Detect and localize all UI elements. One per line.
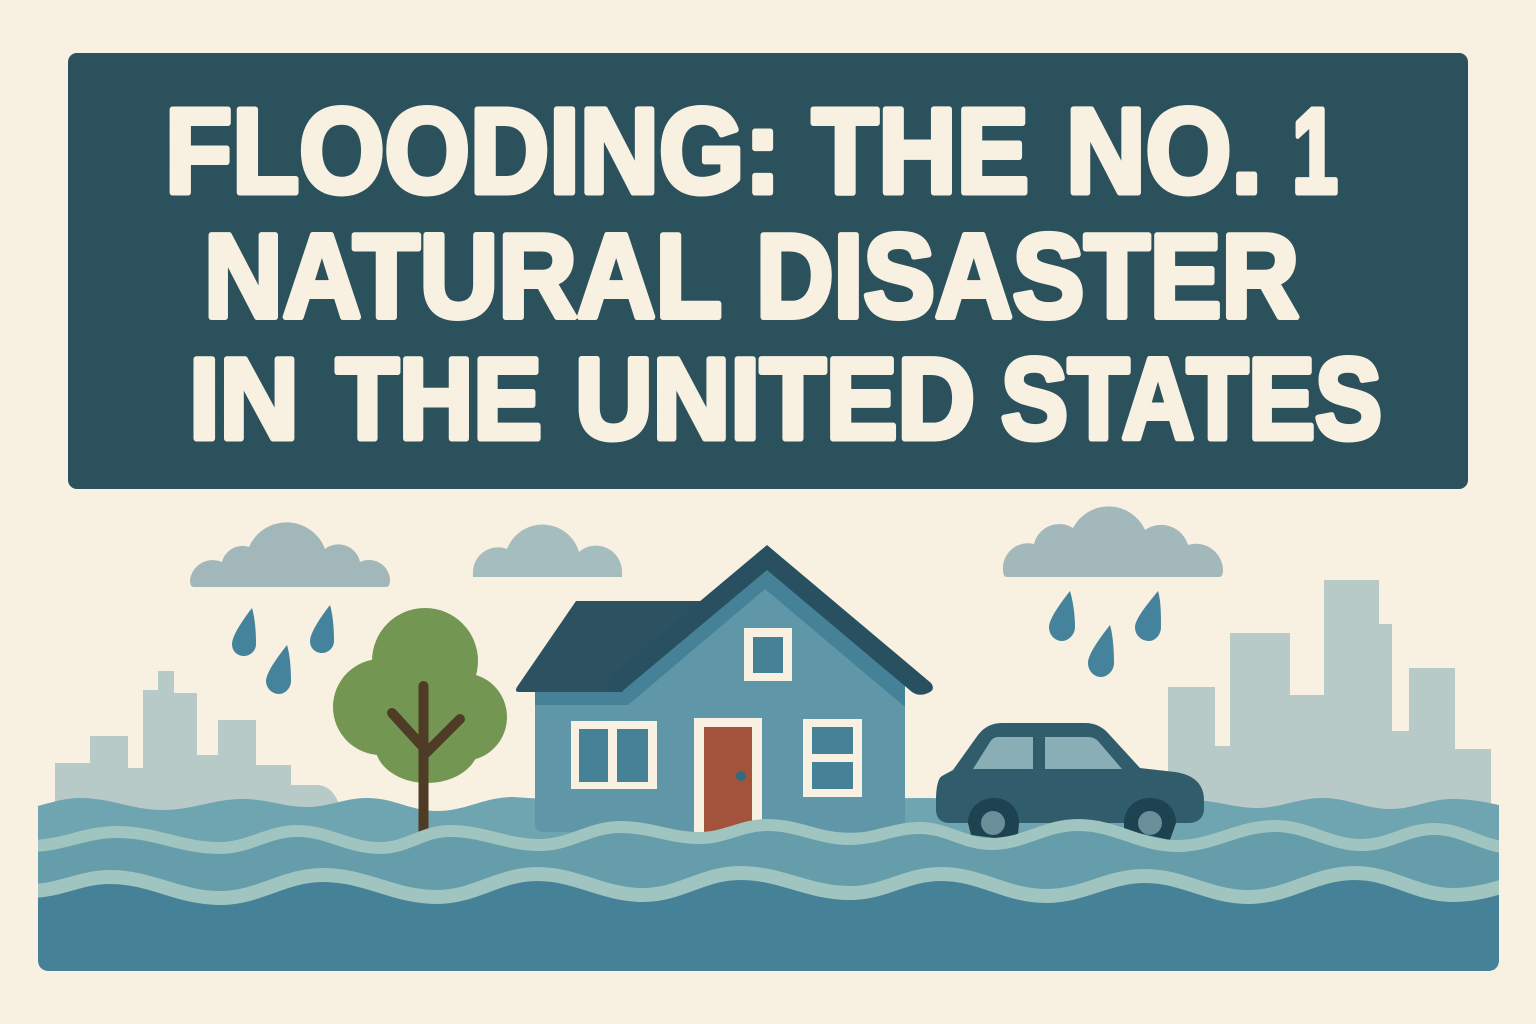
middle water xyxy=(38,831,1499,971)
deep water xyxy=(38,880,1499,971)
house roof shadow xyxy=(535,568,905,707)
cloud: middle xyxy=(473,525,622,577)
title line 3: UNITED xyxy=(575,336,975,464)
right city skyline xyxy=(1168,580,1491,815)
title line 1 xyxy=(165,83,1338,218)
light wave band upper xyxy=(30,825,1510,848)
icon: rain drops right xyxy=(1049,591,1161,677)
tree trunk and branches xyxy=(392,686,460,835)
car xyxy=(936,723,1204,840)
water: back wave layer xyxy=(38,797,1499,980)
title line 3: IN xyxy=(189,336,299,464)
title line 1: 1 xyxy=(1292,83,1338,218)
title line 3: THE xyxy=(336,336,542,464)
left window xyxy=(571,721,657,789)
gable roof xyxy=(608,545,933,695)
left city skyline xyxy=(55,671,340,815)
house body xyxy=(535,575,905,832)
upper window xyxy=(744,628,792,681)
door xyxy=(694,718,762,835)
cloud: right xyxy=(1003,506,1223,577)
title line 1: NO. xyxy=(1066,83,1262,218)
low roof xyxy=(516,601,702,692)
title line 3: STATES xyxy=(1001,336,1382,464)
tree xyxy=(333,608,507,835)
title line 2: NATURAL xyxy=(204,210,722,343)
light wave band lower xyxy=(30,873,1510,898)
car body xyxy=(936,723,1204,823)
house xyxy=(516,545,933,835)
title line 2 xyxy=(204,210,1299,343)
car windows xyxy=(973,737,1122,769)
car wheels xyxy=(968,798,1176,840)
tree canopy xyxy=(333,608,507,783)
title line 2: DISASTER xyxy=(756,210,1299,343)
title line 1: FLOODING: xyxy=(165,83,781,218)
water: front wave layers xyxy=(30,825,1510,980)
icon: rain drops left xyxy=(232,605,334,694)
title line 3 xyxy=(189,336,1382,464)
cloud: left xyxy=(190,522,390,587)
title banner xyxy=(68,53,1468,489)
right window xyxy=(803,719,862,797)
title line 1: THE xyxy=(812,83,1029,218)
